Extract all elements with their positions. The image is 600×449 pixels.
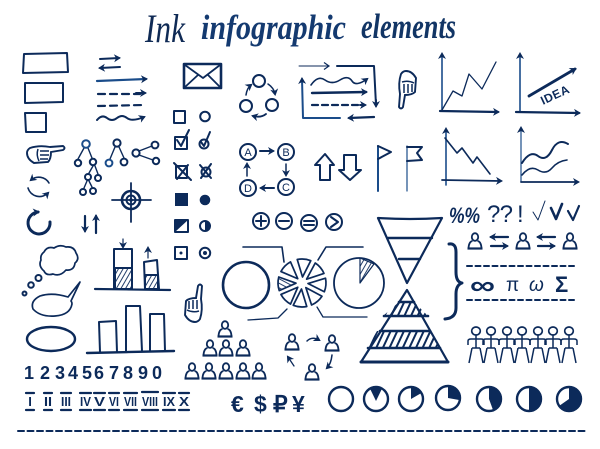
- person pyramid: [184, 321, 266, 378]
- icon: rotating arrows: [28, 177, 49, 197]
- symbols row: ??: [487, 201, 513, 228]
- icon: target: [112, 183, 151, 222]
- operator circles: [253, 213, 342, 231]
- persons with exchange arrows: [468, 233, 578, 248]
- curly brace: [445, 244, 462, 319]
- roman numerals: VI: [109, 394, 119, 409]
- circles with connectors and wedge pie: [223, 247, 384, 320]
- ABCD cycle diagram: C: [282, 182, 290, 194]
- currency symbols: €$₽¥: [231, 391, 305, 417]
- arrows set: [97, 58, 146, 120]
- roman numerals: [26, 392, 189, 410]
- roman numerals: IV: [80, 394, 91, 409]
- icon: hand pointing up: [185, 284, 202, 322]
- math symbols: ∞: [470, 270, 495, 300]
- title: elements: [361, 7, 456, 46]
- dashed divider: [467, 265, 577, 267]
- symbols row: [449, 201, 579, 228]
- chart: falling line: [442, 129, 501, 185]
- text boxes: [23, 53, 68, 132]
- icon: tree hierarchies: [75, 139, 127, 195]
- process arrow diagram: [299, 66, 376, 118]
- title: [144, 6, 456, 51]
- digits: 1234567890: [24, 363, 162, 383]
- icon: circular arrow: [28, 212, 50, 234]
- math symbols: ω: [529, 275, 544, 296]
- symbols row: !: [517, 201, 524, 228]
- math symbols: π: [506, 275, 519, 296]
- cycle of three circles: [240, 75, 278, 117]
- roman numerals: VIII: [142, 394, 158, 409]
- bottom dashed line: [18, 430, 586, 432]
- progress pie circles: [329, 386, 581, 411]
- dashed divider: [467, 299, 577, 301]
- outline arrows up and down: [315, 154, 361, 180]
- roman numerals: IX: [163, 394, 175, 409]
- icon: pointing hand: [27, 146, 64, 163]
- icon: flags: [378, 146, 422, 191]
- title: Ink: [144, 6, 186, 51]
- bar chart: stacked: [95, 239, 170, 290]
- title: infographic: [201, 8, 346, 47]
- math symbols: Σ: [555, 272, 568, 297]
- ABCD cycle diagram: [240, 144, 294, 196]
- roman numerals: V: [94, 394, 105, 409]
- chart: rising line: [440, 54, 498, 112]
- chart: idea arrow: [516, 54, 579, 113]
- icon: envelope: [184, 64, 221, 88]
- ABCD cycle diagram: A: [244, 147, 252, 159]
- icon: hand pointing down: [399, 71, 416, 108]
- roman numerals: II: [44, 394, 52, 409]
- roman numerals: I: [28, 394, 32, 409]
- chart: idea arrow: IDEA: [538, 82, 572, 108]
- checkbox and radio column: [174, 111, 211, 259]
- icon: share nodes: [132, 142, 159, 164]
- chart: two wavy lines: [521, 128, 578, 182]
- ABCD cycle diagram: B: [282, 147, 290, 159]
- stick figures: [468, 327, 577, 363]
- bar chart: outline: [87, 306, 174, 353]
- symbols row: %%: [449, 203, 480, 228]
- person cycle: [284, 334, 340, 380]
- inverted triangle: [378, 218, 442, 283]
- speech bubbles: [22, 246, 80, 351]
- icon: up and down arrows: [85, 216, 96, 233]
- math symbols: [470, 270, 568, 300]
- ABCD cycle diagram: D: [244, 183, 252, 195]
- roman numerals: X: [179, 394, 189, 409]
- roman numerals: VII: [124, 394, 137, 409]
- pyramid: [361, 290, 448, 362]
- roman numerals: III: [61, 394, 71, 409]
